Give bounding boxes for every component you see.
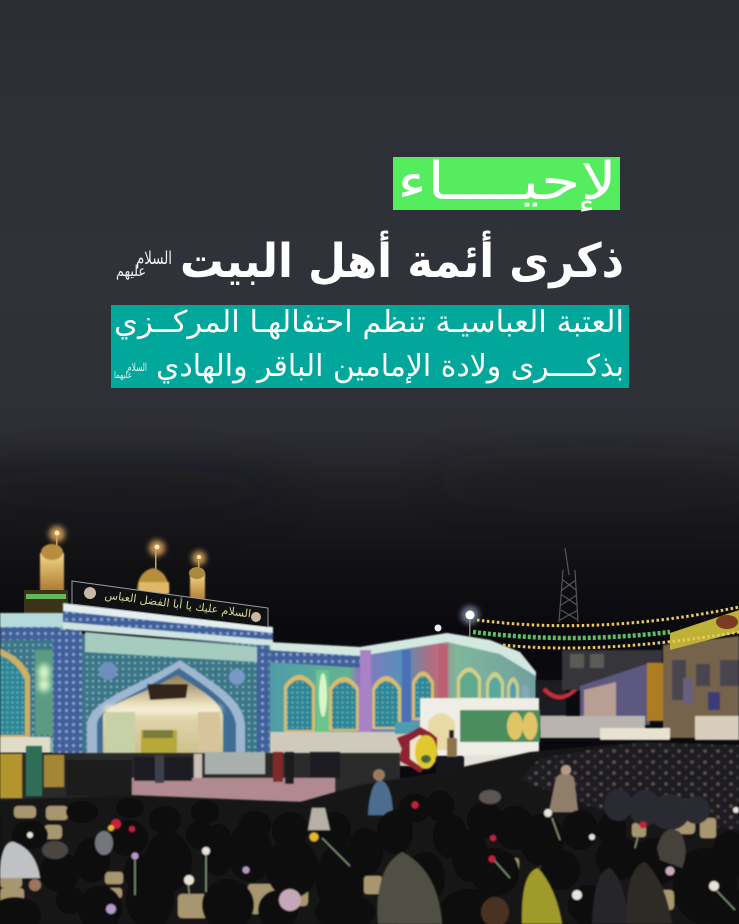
right curved wing of facade — [268, 633, 536, 766]
seated crowd — [0, 742, 739, 924]
subtitle line 2: بذكــــرى ولادة الإمامين الباقر والهادي — [156, 349, 624, 384]
flower star decoration — [397, 727, 438, 773]
street lamps — [434, 606, 479, 637]
crowd base — [0, 742, 739, 924]
honorific: peace be upon them — [116, 248, 172, 280]
chairs — [0, 806, 739, 924]
honorific small — [114, 361, 147, 381]
guest in beige coat — [549, 773, 578, 812]
illuminated sign above portal — [72, 581, 268, 627]
yellow banner and light strings — [473, 607, 739, 650]
label: green heading box: لإحيــــاء — [397, 152, 617, 212]
honorific: peace be upon them: عليهم — [116, 262, 146, 280]
minarets and domes — [24, 526, 206, 616]
black chadors — [0, 791, 739, 924]
left wing of facade — [0, 613, 66, 753]
subtitle line 1: العتبة العباسيـة تنظم احتفالهـا المركــزي — [114, 305, 624, 340]
illuminated sign above portal: السلام عليك يا أبا الفضل العباس — [104, 587, 252, 621]
plain-dressed guest in blue — [368, 780, 393, 815]
ground plaza and standing guests — [0, 746, 464, 813]
main portal — [53, 603, 273, 756]
coats of men in rear rows — [604, 789, 710, 830]
honorific small: عليهما — [114, 371, 132, 381]
title: ذكرى أئمة أهل البيت — [180, 230, 624, 289]
patterned and coloured coats — [378, 852, 442, 924]
telecom tower — [559, 548, 578, 622]
roses held by audience — [27, 802, 739, 914]
honorific: peace be upon them: السلام — [136, 248, 172, 269]
subtitle box — [111, 305, 629, 388]
photo: shrine and crowd — [0, 526, 739, 924]
honorific small: السلام — [127, 361, 147, 374]
rear audience — [520, 742, 739, 830]
stage backdrop — [420, 698, 573, 771]
surrounding buildings — [536, 636, 739, 740]
